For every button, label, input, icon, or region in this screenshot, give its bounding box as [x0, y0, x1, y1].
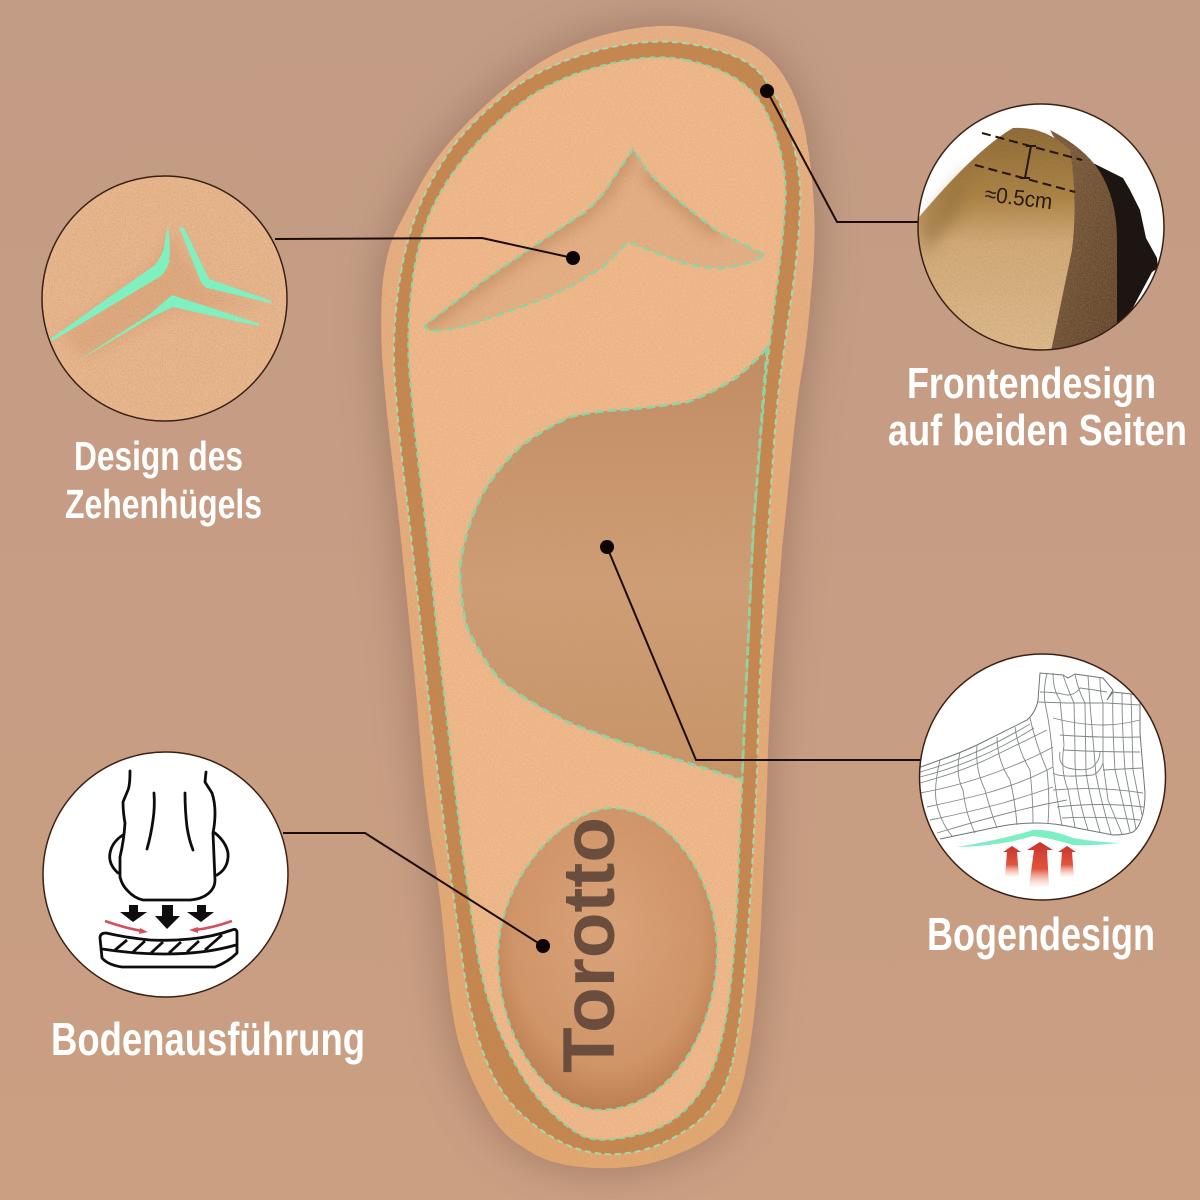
insole: [370, 15, 830, 1180]
icon: red pressure arrows: [105, 921, 232, 931]
cork layer: [1045, 130, 1117, 356]
toe ridge: [425, 149, 765, 331]
arch support: [460, 348, 767, 780]
footbed face: [918, 128, 1074, 350]
callout dot: heel: [536, 939, 550, 953]
toe ridge shading: [425, 149, 720, 325]
measurement text: ≈0.5cm: [983, 181, 1054, 214]
heading: Frontendesign auf beiden Seiten: [888, 359, 1187, 455]
wireframe foot: [918, 673, 1145, 839]
callout line: heel: [283, 833, 543, 946]
left shading: [920, 165, 970, 255]
mint arch highlight: [957, 830, 1120, 847]
heading: Design des Zehenhügels: [65, 433, 262, 527]
icon: foot outline: [110, 771, 228, 900]
callout line: front: [767, 91, 920, 222]
heading: Design des Zehenhügels: Design des: [74, 433, 243, 479]
logo: Torotto: Torotto: [549, 817, 630, 1073]
heading: Bodenausführung: Bodenausführung: [51, 1013, 365, 1065]
toe ridge stitching: [425, 149, 765, 331]
callout dot: front: [760, 84, 774, 98]
panel: front edge close-up: [900, 104, 1164, 356]
suede grain: [40, 174, 290, 424]
callout dot: toe: [566, 251, 580, 265]
insole shadow: [381, 26, 815, 1168]
black outsole: [1094, 163, 1158, 323]
icon: sole cross-section: [100, 929, 237, 967]
panel: arch wireframe close-up: [918, 654, 1166, 900]
insole rim: [381, 26, 815, 1168]
panel: heel icon: [43, 752, 288, 997]
red support arrows: [1003, 846, 1021, 877]
panel: toe ridge close-up: [40, 174, 290, 424]
stitched channel: [394, 42, 800, 1154]
texture: [920, 128, 1117, 349]
callout dot: arch: [600, 540, 614, 554]
callout line: arch: [607, 547, 922, 760]
mint toe ridge highlight: [50, 226, 272, 364]
measurement dashes: [975, 133, 1082, 192]
ridge shading: [67, 240, 238, 355]
suede texture: [370, 15, 830, 1180]
icon: downward arrows: [120, 905, 214, 929]
footbed surface: [408, 57, 786, 1140]
heading: Design des Zehenhügels: Zehenhügels: [65, 481, 262, 527]
heel cup: [498, 808, 717, 1110]
callout line: toe: [275, 238, 573, 258]
